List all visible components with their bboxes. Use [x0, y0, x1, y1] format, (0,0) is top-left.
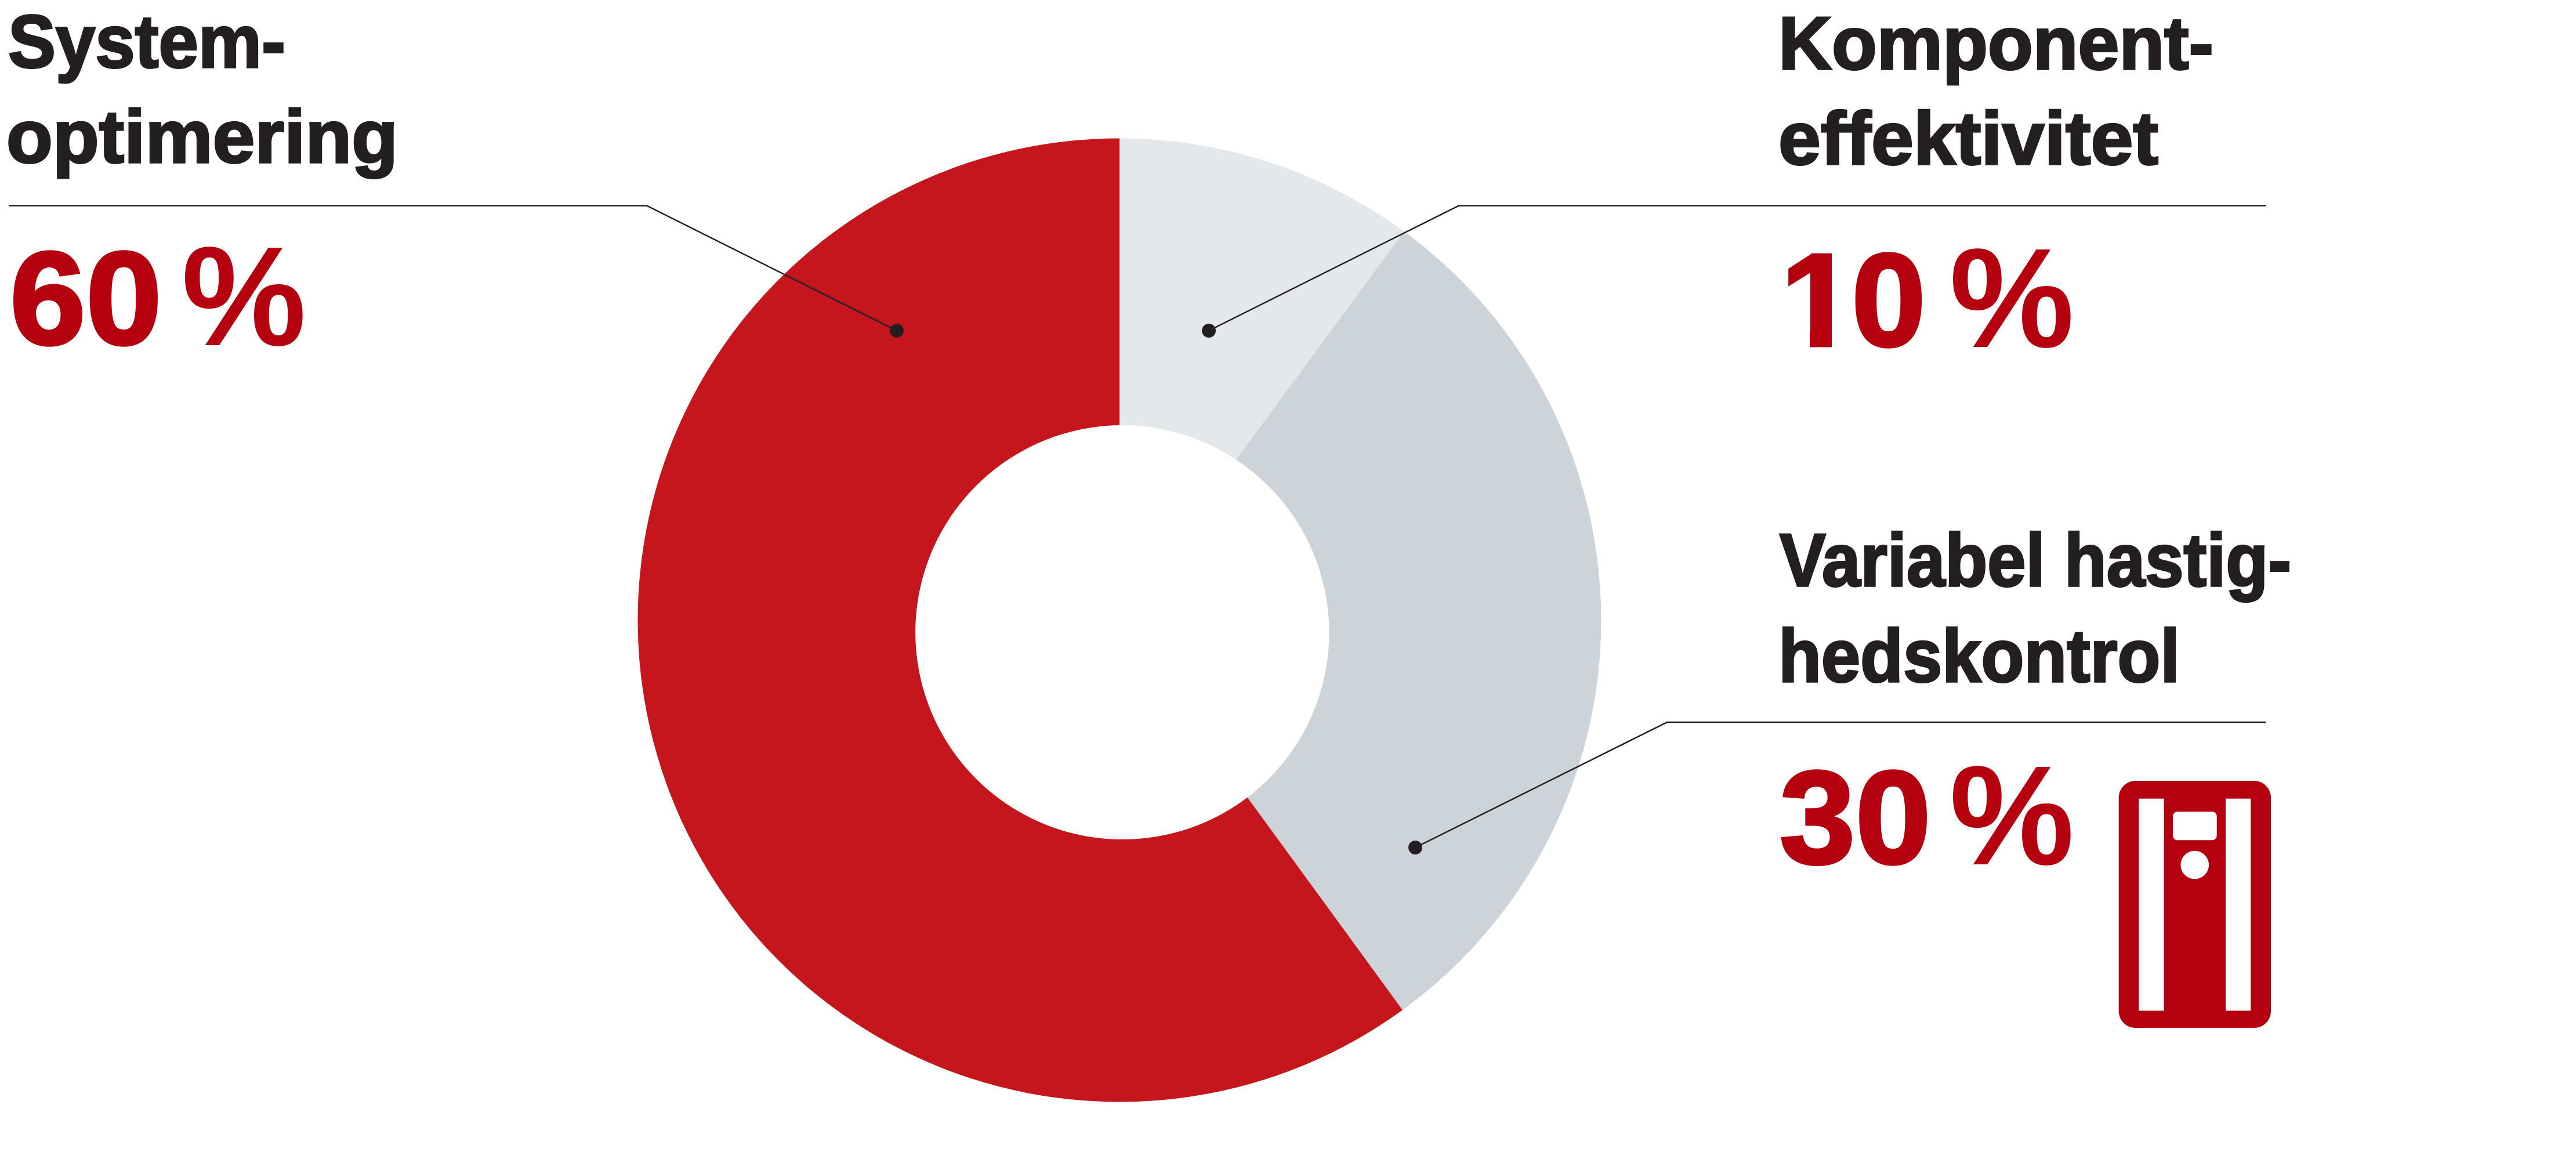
heading: Komponenteffektivitet	[1778, 2, 2213, 180]
value: 10 %: %	[1950, 219, 2074, 377]
heading: Systemoptimering: optimering	[6, 95, 398, 179]
value: 10 %: 0	[1852, 227, 1926, 374]
heading: Komponenteffektivitet: effektivitet	[1778, 97, 2158, 180]
heading: Variabel hastighedskontrol: hedskontrol	[1778, 614, 2180, 698]
icon: frequency drive	[2119, 781, 2271, 1028]
leader line: Variabel hastighedskontrol	[1408, 722, 2266, 854]
value: 10 %: 1	[1781, 227, 1854, 374]
segment: Systemoptimering 60 %	[637, 138, 1403, 1102]
heading: Systemoptimering	[6, 0, 398, 179]
heading: Komponenteffektivitet: Komponent-	[1778, 2, 2213, 85]
value: 60 %: %	[182, 217, 306, 375]
segment: Variabel hastighedskontrol 30 %	[1236, 231, 1601, 1010]
value: 30 %: %	[1950, 736, 2074, 895]
heading: Variabel hastighedskontrol	[1778, 519, 2291, 698]
value: 30 %: 30	[1780, 744, 1931, 892]
value: 10 %	[1778, 219, 2074, 377]
leader line: Systemoptimering	[9, 205, 904, 338]
donut chart	[637, 138, 1601, 1102]
value: 60 %: 60	[10, 225, 162, 372]
heading: Variabel hastighedskontrol: Variabel hastig-	[1780, 519, 2291, 602]
leader line: Komponenteffektivitet	[1202, 205, 2266, 338]
segment: Komponenteffektivitet 10 %	[1119, 138, 1404, 459]
heading: Systemoptimering: System-	[8, 0, 285, 84]
value: 60 %	[10, 217, 306, 375]
value: 30 %	[1780, 736, 2074, 895]
